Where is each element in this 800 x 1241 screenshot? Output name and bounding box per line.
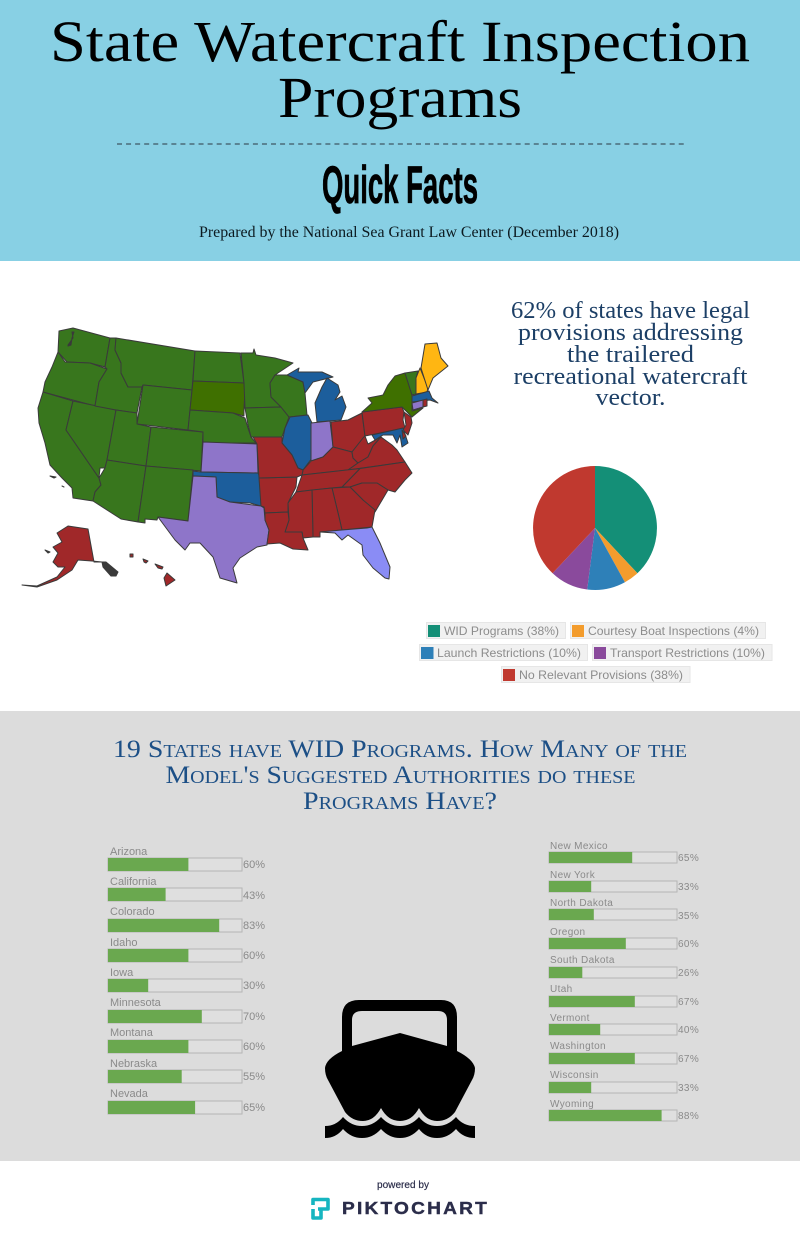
bar chart: left states: Arizona	[110, 846, 148, 858]
pie legend	[420, 622, 772, 682]
map: US states by program type	[22, 328, 448, 587]
bar chart: left states: 30%	[243, 980, 265, 992]
heading: 19 states: 19 States have WID Programs. How Many of the	[113, 736, 687, 763]
panel: header	[0, 0, 800, 261]
footer: powered by Piktochart	[313, 1179, 489, 1218]
bar chart: right states: 33%	[678, 882, 699, 893]
text block: 62% of states: recreational watercraft	[514, 364, 748, 390]
heading: 19 states	[113, 736, 687, 815]
legend: launch restrictions: Launch Restrictions (10%)	[437, 646, 581, 660]
legend: transport restrictions: Transport Restrictions (10%)	[610, 646, 765, 660]
bar chart: right states: Wyoming	[550, 1099, 594, 1110]
bar chart: left states: Idaho	[110, 937, 138, 949]
bar chart: right states: 88%	[678, 1111, 699, 1122]
heading: quick facts: Quick Facts	[322, 156, 478, 215]
bar chart: left states: Colorado	[110, 906, 155, 918]
title	[50, 9, 750, 130]
bar chart: right states: Wisconsin	[550, 1070, 599, 1081]
bar chart: right states: 60%	[678, 939, 699, 950]
icon: Piktochart logo	[313, 1200, 328, 1218]
bar chart: right states: 67%	[678, 997, 699, 1008]
bar chart: right states: 65%	[678, 853, 699, 864]
bar chart: right states: 40%	[678, 1025, 699, 1036]
bar chart: left states: 83%	[243, 920, 265, 932]
heading: 19 states: Model's Suggested Authorities do these	[166, 762, 636, 789]
bar chart: left states: 55%	[243, 1071, 265, 1083]
subtitle: Prepared by the National Sea Grant Law Center (December 2018)	[199, 224, 619, 241]
text: powered by: powered by	[377, 1179, 430, 1191]
text block: 62% of states: 62% of states have legal	[511, 298, 750, 324]
bar chart: right states: Oregon	[550, 927, 585, 938]
bar chart: left states: 60%	[243, 1041, 265, 1053]
heading: 19 states: Programs Have?	[303, 788, 497, 815]
text block: 62% of states: the trailered	[567, 342, 694, 368]
bar chart: left states: 60%	[243, 859, 265, 871]
icon: boat	[325, 1000, 475, 1138]
title: State Watercraft Inspection	[50, 9, 750, 74]
bar chart: right states: Vermont	[550, 1013, 590, 1024]
legend: WID programs: WID Programs (38%)	[444, 624, 559, 638]
bar chart: right states: 33%	[678, 1083, 699, 1094]
bar chart: right states: New York	[550, 870, 596, 881]
bar chart: left states: Nevada	[110, 1088, 149, 1100]
bar chart: left states: Minnesota	[110, 997, 162, 1009]
bar chart: left states: California	[110, 876, 157, 888]
bar chart: left states: Montana	[110, 1027, 154, 1039]
panel: WID programs	[0, 711, 800, 1161]
bar chart: left states: Nebraska	[110, 1058, 158, 1070]
bar chart: right states	[549, 841, 699, 1122]
bar chart: right states: North Dakota	[550, 898, 613, 909]
text: Piktochart: PIKTOCHART	[342, 1198, 489, 1218]
text block: 62% of states: provisions addressing	[518, 320, 743, 346]
text block: 62% of states: vector.	[596, 385, 666, 411]
legend: no relevant provisions: No Relevant Provisions (38%)	[519, 668, 683, 682]
text block: 62% of states	[511, 298, 750, 411]
bar chart: left states: 43%	[243, 890, 265, 902]
bar chart: right states: Washington	[550, 1041, 606, 1052]
bar chart: left states: 60%	[243, 950, 265, 962]
bar chart: right states: South Dakota	[550, 955, 615, 966]
title: Programs	[278, 65, 522, 130]
bar chart: left states: 65%	[243, 1102, 265, 1114]
legend: courtesy boat inspections: Courtesy Boat Inspections (4%)	[588, 624, 759, 638]
bar chart: right states: 35%	[678, 911, 699, 922]
bar chart: right states: New Mexico	[550, 841, 608, 852]
pie chart	[533, 466, 657, 590]
bar chart: right states: Utah	[550, 984, 573, 995]
bar chart: right states: 26%	[678, 968, 699, 979]
bar chart: left states: Iowa	[110, 967, 134, 979]
bar chart: left states	[108, 846, 265, 1114]
bar chart: right states: 67%	[678, 1054, 699, 1065]
bar chart: left states: 70%	[243, 1011, 265, 1023]
